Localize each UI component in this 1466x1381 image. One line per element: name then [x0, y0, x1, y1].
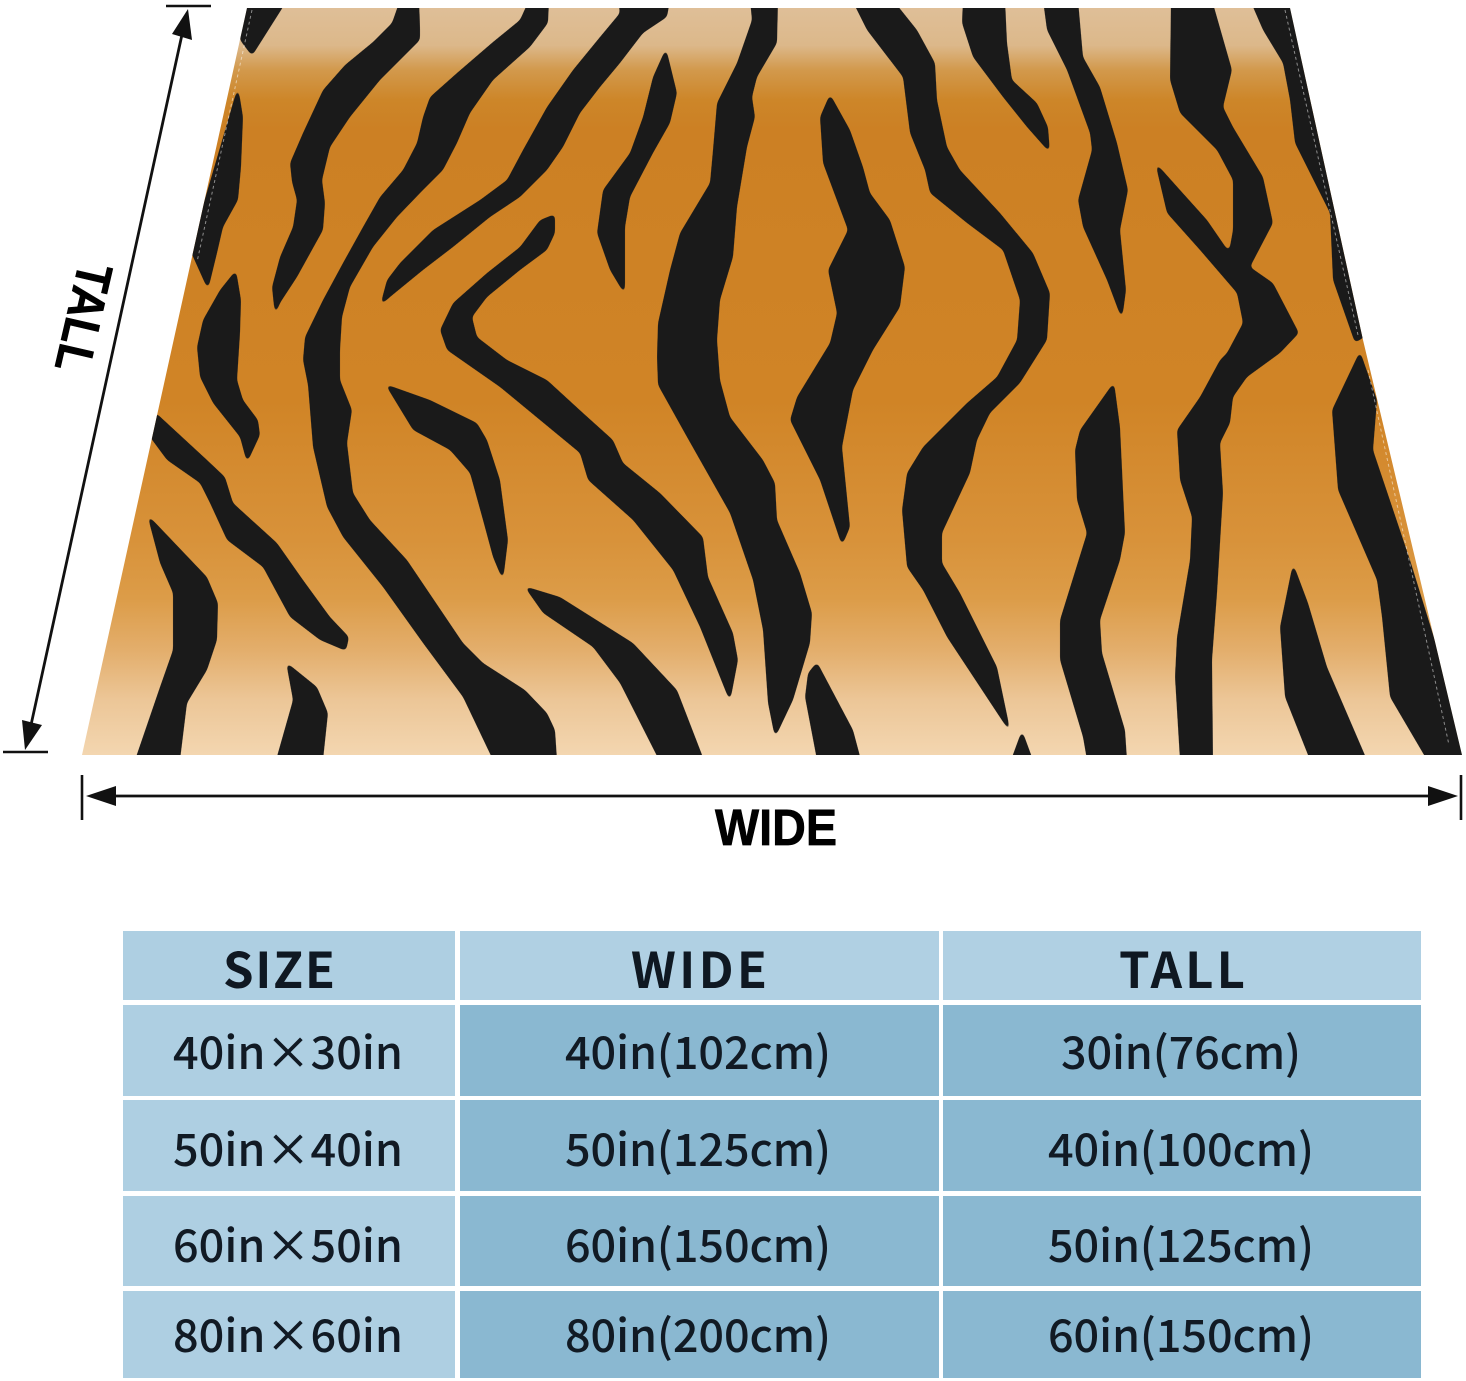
dimension arrow: wide [82, 775, 1461, 820]
row: 40in x 30in: 30in(76cm) [1061, 1017, 1301, 1082]
stitching [197, 10, 1449, 745]
label: wide: WIDE [715, 799, 837, 856]
row: 60in x 50in [123, 1196, 1421, 1286]
row: 60in x 50in: 50in(125cm) [1048, 1210, 1314, 1275]
row: 60in x 50in: 60in×50in [173, 1210, 403, 1275]
row: 50in x 40in [123, 1100, 1421, 1191]
row: 50in x 40in: 50in(125cm) [565, 1114, 831, 1179]
dimension arrow: tall [3, 6, 211, 752]
row: 40in x 30in: 40in(102cm) [565, 1017, 831, 1082]
row: 80in x 60in [123, 1291, 1421, 1378]
tiger stripes [135, 0, 1466, 770]
table header row: TALL [1119, 932, 1245, 1003]
size table [123, 931, 1421, 1378]
blanket base [82, 8, 1462, 755]
row: 80in x 60in: 80in×60in [173, 1300, 403, 1365]
table header row [123, 931, 1421, 1003]
row: 50in x 40in: 50in×40in [173, 1114, 403, 1179]
row: 50in x 40in: 40in(100cm) [1048, 1114, 1314, 1179]
label: tall: TALL [44, 258, 123, 378]
blanket with tiger stripes [82, 0, 1466, 770]
row: 80in x 60in: 60in(150cm) [1048, 1300, 1314, 1365]
row: 60in x 50in: 60in(150cm) [565, 1210, 831, 1275]
row: 40in x 30in [123, 1005, 1421, 1096]
table header row: SIZE [223, 932, 335, 1003]
table header row: WIDE [631, 932, 767, 1003]
row: 40in x 30in: 40in×30in [173, 1017, 403, 1082]
row: 80in x 60in: 80in(200cm) [565, 1300, 831, 1365]
